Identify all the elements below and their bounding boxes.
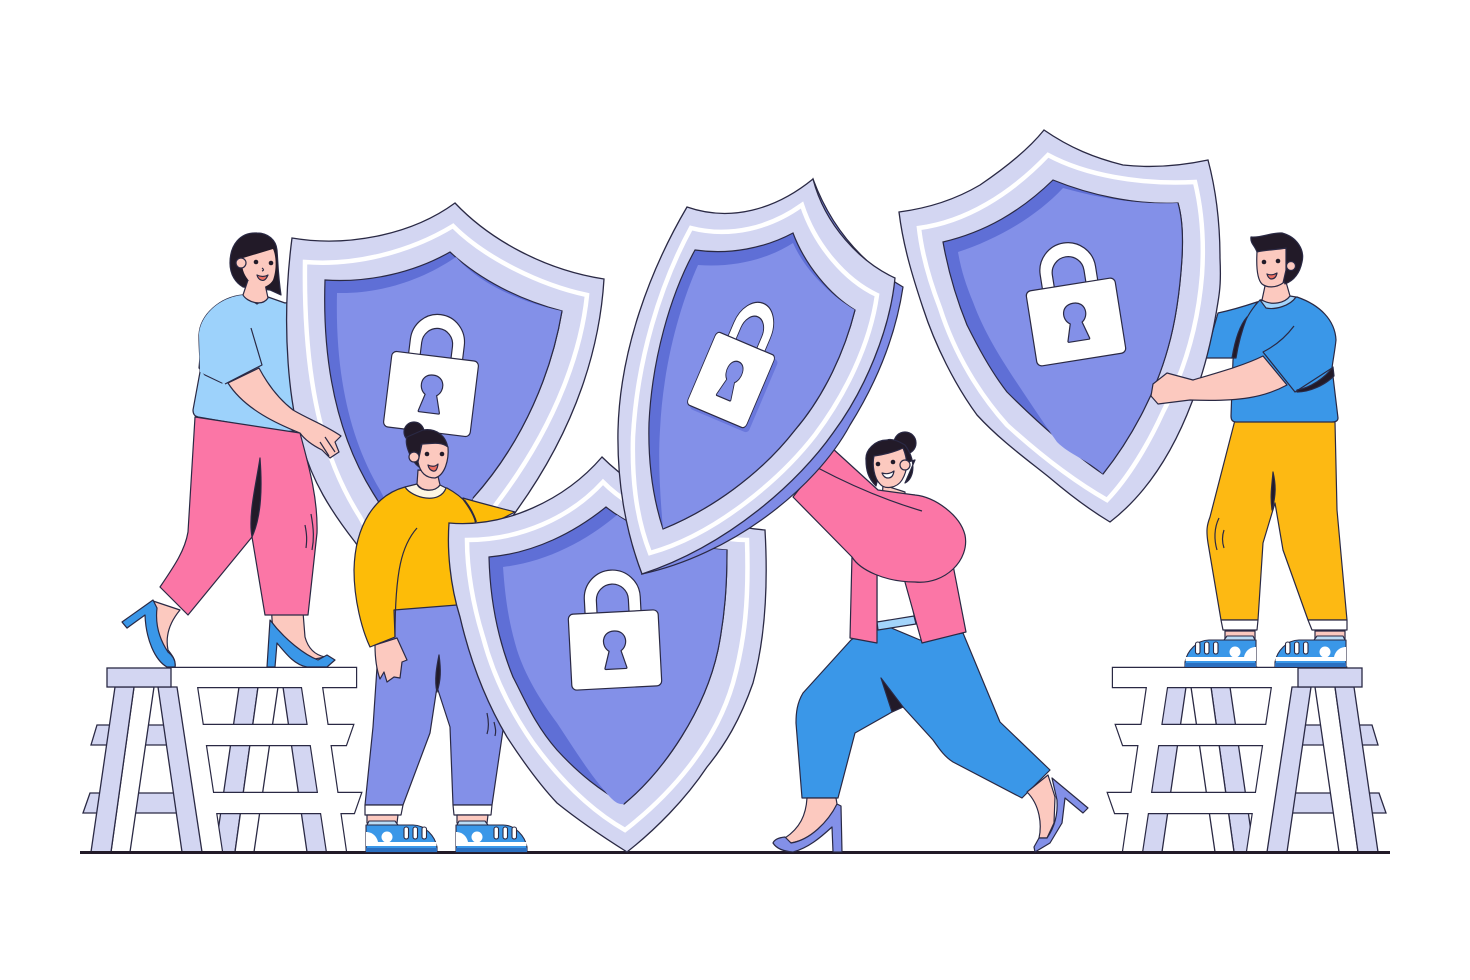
shield left — [287, 203, 604, 620]
padlock — [566, 568, 662, 690]
big sleeve arms — [793, 448, 966, 582]
arm reaching — [463, 498, 515, 530]
left heel — [773, 804, 842, 852]
cuffs and shoes — [1221, 620, 1347, 630]
sweater — [354, 487, 480, 647]
arm and hand — [228, 368, 341, 458]
ground line — [80, 851, 1390, 854]
woman yellow sweater — [354, 422, 527, 852]
strap and sleeve — [199, 357, 222, 383]
woman left torso — [193, 295, 300, 432]
head — [1262, 282, 1290, 303]
shirt — [877, 560, 915, 622]
right foot skin — [1027, 775, 1055, 838]
ladder right — [1108, 668, 1386, 852]
blue trousers — [796, 622, 1050, 798]
pink trousers — [160, 417, 317, 615]
hand — [375, 638, 407, 682]
man back arm — [1205, 302, 1257, 358]
left foot skin — [785, 798, 837, 843]
right heel — [1034, 778, 1088, 852]
ladder left — [83, 668, 361, 852]
blue t-shirt — [1231, 297, 1338, 422]
cuffs and shoes — [365, 805, 492, 815]
jacket panels — [850, 555, 877, 643]
woman pink jacket — [773, 432, 1088, 852]
padlock — [686, 291, 793, 429]
collar — [1260, 296, 1296, 309]
head — [882, 485, 905, 505]
trousers — [365, 603, 505, 805]
shield right — [899, 130, 1220, 522]
shield middle — [618, 179, 903, 574]
padlock — [1019, 236, 1126, 367]
arm and hand — [1151, 356, 1287, 404]
head — [417, 470, 440, 490]
collar — [405, 484, 446, 498]
woman left figure — [122, 233, 341, 667]
man right figure — [1151, 233, 1347, 667]
yellow trousers — [1207, 420, 1347, 620]
padlock — [383, 309, 484, 437]
padlock shadow — [689, 336, 779, 433]
legs and shoes — [122, 600, 335, 667]
shield bottom — [448, 457, 766, 852]
head — [230, 233, 281, 295]
